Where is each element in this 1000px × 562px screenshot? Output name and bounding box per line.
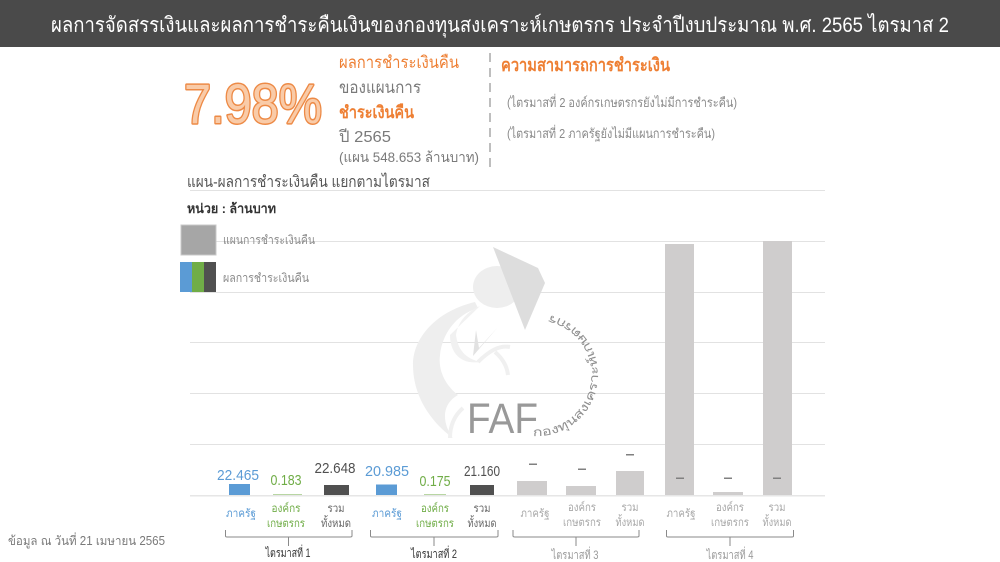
value labels: 22.648 (314, 460, 356, 477)
quarter 4 bars (665, 241, 792, 495)
quarter 3 category labels (520, 500, 644, 529)
dash labels (529, 454, 781, 479)
quarter 2 category labels: องค์กร (421, 501, 449, 515)
quarter labels: ไตรมาสที่ 2 (410, 545, 457, 561)
quarter labels: ไตรมาสที่ 3 (551, 546, 599, 562)
quarter 2 category labels: ทั้งหมด (468, 515, 496, 530)
watermark logo: FAF: กองทุนสงเคราะห์เกษตรกร (534, 316, 598, 436)
watermark logo: FAF: FAF (467, 395, 538, 443)
quarter 1 category labels: เกษตรกร (267, 518, 305, 530)
bar chart (190, 241, 825, 496)
quarter 1 category labels: รวม (328, 503, 344, 515)
quarter 1 category labels: องค์กร (272, 501, 300, 515)
quarter labels: ไตรมาสที่ 4 (706, 546, 754, 562)
quarter 2 category labels: ภาครัฐ (372, 508, 402, 520)
quarter 2 bars (376, 484, 494, 496)
quarter 4 category labels: องค์กร (716, 500, 744, 514)
quarter 3 bars (517, 471, 644, 495)
quarter 4 category labels (666, 500, 792, 529)
KPI description (339, 53, 479, 165)
value labels: 0.183 (270, 472, 302, 489)
quarter 3 category labels: ภาครัฐ (520, 508, 550, 520)
KPI description: ปี 2565 (339, 128, 391, 146)
value labels: 0.175 (420, 473, 450, 490)
quarter 1 category labels: ภาครัฐ (226, 508, 256, 520)
quarter labels (265, 544, 754, 562)
quarter 1 category labels: ทั้งหมด (321, 515, 351, 530)
data date note: ข้อมูล ณ วันที่ 21 เมษายน 2565 (8, 532, 165, 549)
KPI description: ของแผนการ (339, 78, 421, 97)
KPI: repayment percentage: 7.98% (184, 72, 322, 135)
value labels: 22.465 (217, 467, 259, 484)
panel: repayment ability: ความสามารถการชำระเงิน (501, 55, 671, 75)
quarter 1 category labels (226, 501, 351, 530)
panel: repayment ability: (ไตรมาสที่ 2 องค์กรเกษตรกรยังไม่มีการชำระคืน) (507, 94, 737, 110)
panel: repayment ability (501, 55, 737, 142)
KPI description: ผลการชำระเงินคืน (339, 53, 459, 72)
quarter 3 category labels: องค์กร (568, 500, 596, 514)
value labels (217, 460, 500, 490)
watermark logo: FAF (413, 247, 598, 443)
panel: repayment ability: (ไตรมาสที่ 2 ภาครัฐยังไม่มีแผนการชำระคืน) (507, 125, 715, 142)
quarter brackets (226, 530, 794, 546)
quarter 3 category labels: ทั้งหมด (616, 514, 644, 529)
quarter 3 category labels: เกษตรกร (563, 517, 601, 529)
quarter 4 category labels: ภาครัฐ (666, 508, 696, 520)
quarter 4 category labels: รวม (768, 502, 786, 514)
quarter 2 category labels: รวม (474, 503, 490, 515)
legend (180, 225, 315, 292)
value labels: 20.985 (365, 463, 409, 480)
quarter 2 category labels: เกษตรกร (416, 518, 454, 530)
quarter 1 bars (229, 484, 349, 496)
value labels: 21.160 (464, 463, 500, 480)
chart heading: แผน-ผลการชำระเงินคืน แยกตามไตรมาส (187, 172, 430, 191)
KPI description: (แผน 548.653 ล้านบาท) (339, 149, 479, 165)
quarter 4 category labels: เกษตรกร (711, 517, 749, 529)
KPI description: ชำระเงินคืน (339, 102, 414, 122)
quarter 3 category labels: รวม (622, 502, 638, 514)
quarter 2 category labels (372, 501, 496, 530)
legend: แผนการชำระเงินคืน (223, 233, 315, 247)
quarter labels: ไตรมาสที่ 1 (265, 544, 311, 560)
unit label: หน่วย : ล้านบาท (187, 201, 276, 216)
title banner (0, 0, 1000, 47)
quarter 4 category labels: ทั้งหมด (762, 514, 792, 529)
legend: ผลการชำระเงินคืน (223, 271, 309, 285)
